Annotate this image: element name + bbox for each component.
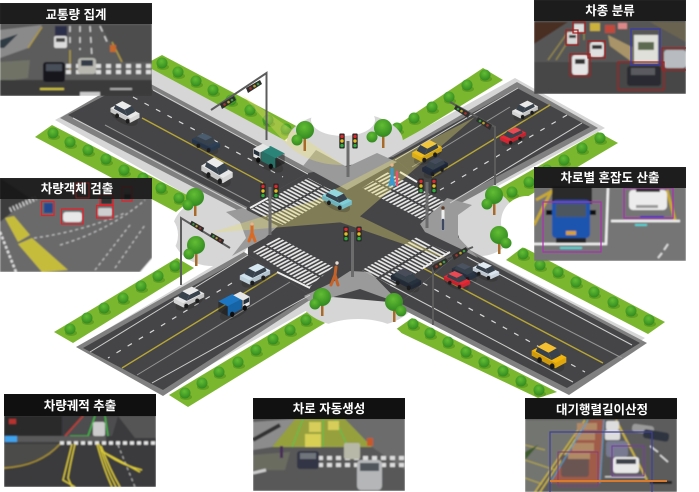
panel: traffic count <box>0 3 152 96</box>
panel heading <box>253 398 405 419</box>
vehicles <box>108 101 568 377</box>
road curbs <box>60 75 647 396</box>
panel: queue length calculation <box>525 398 677 492</box>
panel heading <box>525 398 677 419</box>
corner curbs <box>226 150 478 306</box>
panel heading: 차량궤적 추출 <box>44 398 116 413</box>
panel heading <box>4 394 156 416</box>
asphalt road surface <box>68 80 640 390</box>
panel: vehicle type classification <box>534 0 688 94</box>
camera detection cones <box>210 95 475 260</box>
grass strips with bushes <box>35 55 665 407</box>
sidewalks and corner plazas <box>55 68 645 392</box>
panel: vehicle trajectory extraction <box>4 394 156 487</box>
intersection illustration <box>35 55 665 407</box>
panel: automatic lane generation <box>253 398 405 491</box>
panel heading: 차량객체 검출 <box>41 182 113 196</box>
panel heading: 대기행렬길이산정 <box>556 402 648 417</box>
panel heading <box>0 3 152 24</box>
trees <box>182 119 512 322</box>
panel heading <box>534 167 686 188</box>
pedestrians <box>249 163 445 285</box>
panel heading: 차종 분류 <box>585 4 635 18</box>
panel: vehicle object detection <box>0 178 152 272</box>
lane markings <box>73 88 632 383</box>
panel heading <box>0 178 152 199</box>
panel heading: 교통량 집계 <box>46 8 106 22</box>
panel: congestion by lane <box>534 167 686 261</box>
panel heading: 차로별 혼잡도 산출 <box>561 171 659 185</box>
crosswalks <box>250 172 450 287</box>
panel heading: 차로 자동생성 <box>293 402 365 416</box>
panel heading <box>534 0 686 21</box>
traffic signals <box>181 73 495 325</box>
